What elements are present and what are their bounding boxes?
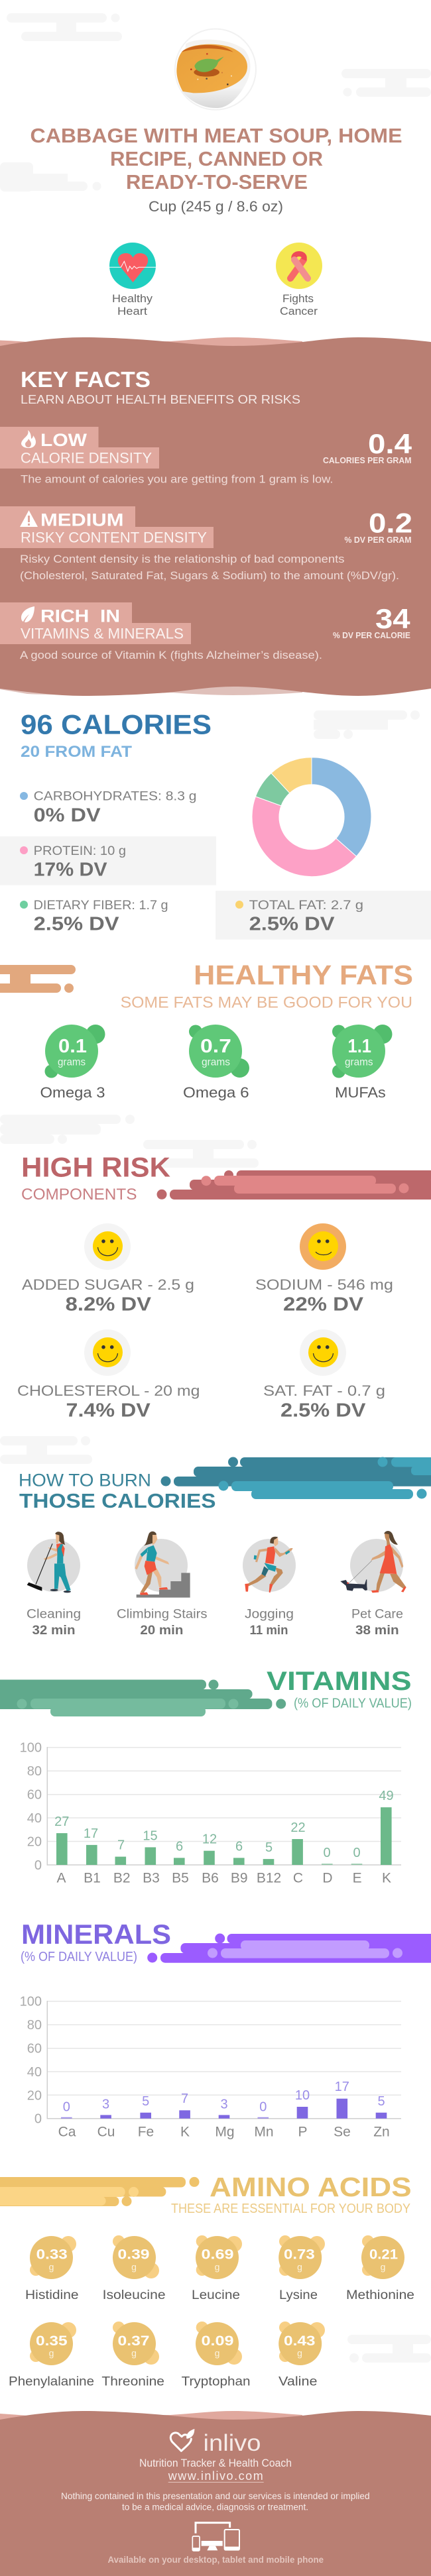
bar chart: vitamins: 0 (353, 1846, 361, 1860)
bar chart: minerals: 5 (142, 2094, 149, 2109)
amino: leucine: 0.69 (202, 2247, 233, 2263)
amino: threonine: g (131, 2347, 137, 2358)
badge: omega 3 (40, 1025, 105, 1101)
bar chart: minerals: Zn (373, 2124, 390, 2139)
label: fights cancer: Cancer (280, 306, 318, 317)
bar chart: minerals: K (180, 2124, 190, 2139)
component: sodium: 22% DV (283, 1294, 364, 1315)
macro: total fat (216, 891, 431, 940)
amino: isoleucine: g (131, 2261, 137, 2272)
label: fights cancer (280, 293, 318, 317)
fact: low calorie density (0, 427, 412, 486)
bar chart: minerals: Cu (97, 2124, 115, 2139)
amino: valine: g (297, 2347, 302, 2358)
macro: protein (0, 836, 216, 885)
bar chart: vitamins: B6 (202, 1871, 219, 1886)
title: RECIPE, CANNED OR (110, 147, 323, 170)
logo: inlivo: inlivo (203, 2430, 261, 2456)
bar chart: minerals: 0 (259, 2100, 267, 2115)
activity: jogging: Jogging (245, 1608, 294, 1621)
badge: omega 6: grams (202, 1057, 230, 1068)
bar chart: minerals: Se (334, 2124, 351, 2139)
fact: rich in vitamins and minerals: A good source of Vitamin K (fights Alzheimer’s disease). (20, 649, 322, 661)
amino: lysine: 0.73 (284, 2247, 315, 2263)
amino: histidine (25, 2236, 79, 2302)
component: cholesterol: 7.4% DV (66, 1400, 151, 1421)
bar chart: vitamins: 6 (176, 1839, 183, 1854)
bar chart: minerals: Ca (58, 2124, 76, 2139)
food photo: bowl of soup (175, 29, 256, 110)
subheading: LEARN ABOUT HEALTH BENEFITS OR RISKS (21, 392, 300, 406)
bar chart: vitamins: 27 (54, 1815, 69, 1829)
amino: leucine (192, 2235, 242, 2302)
activity: jogging (243, 1537, 296, 1638)
bar chart: minerals (20, 1995, 401, 2139)
label: fights cancer: Fights (282, 293, 314, 305)
fact: medium risky content density: MEDIUM (40, 510, 123, 530)
bar chart: vitamins: 12 (202, 1832, 217, 1847)
fact: low calorie density: 0.4 (368, 428, 412, 459)
bar chart: minerals: 17 (335, 2080, 349, 2094)
bar chart: minerals: 20 (27, 2088, 42, 2103)
bar chart: vitamins: B1 (84, 1871, 101, 1886)
activity: climbing stairs: 20 min (140, 1624, 183, 1638)
bar chart: minerals: 80 (27, 2018, 42, 2033)
bar chart: minerals: 10 (295, 2088, 310, 2103)
heading: how to burn those calories (19, 1470, 216, 1512)
bar chart: minerals: 40 (27, 2065, 42, 2080)
component: added sugar (22, 1223, 194, 1315)
bar chart: minerals: 5 (377, 2094, 385, 2109)
bar chart: vitamins: 22 (290, 1820, 306, 1835)
bar chart: minerals: Fe (138, 2124, 154, 2139)
subheading: healthy fats: SOME FATS MAY BE GOOD FOR YOU (121, 994, 412, 1012)
bar chart: minerals: P (298, 2124, 308, 2139)
amino: lysine: g (297, 2261, 302, 2272)
bar chart: minerals: 100 (20, 1995, 42, 2009)
bar chart: minerals: 0 (63, 2100, 70, 2115)
amino: phenylalanine: Phenylalanine (9, 2375, 94, 2388)
activity: pet care: 38 min (355, 1624, 399, 1638)
heading: 96 calories: 96 CALORIES (21, 709, 212, 740)
amino: histidine: g (49, 2261, 54, 2272)
amino: methionine: 0.21 (369, 2247, 398, 2263)
amino: isoleucine (103, 2235, 166, 2302)
bar chart: vitamins: 20 (27, 1834, 42, 1849)
amino: threonine: 0.37 (118, 2333, 150, 2349)
bar chart: vitamins: B12 (257, 1871, 281, 1886)
badge: mufas (332, 1025, 393, 1101)
fact: rich in vitamins and minerals (0, 602, 410, 661)
amino: histidine: Histidine (25, 2288, 79, 2302)
fact: low calorie density: The amount of calories you are getting from 1 gram is low. (21, 474, 333, 486)
macro: dietary fiber (20, 899, 168, 934)
amino: tryptophan: Tryptophan (182, 2375, 251, 2388)
bar chart: vitamins: B9 (231, 1871, 248, 1886)
subheading: from fat: 20 FROM FAT (21, 743, 132, 761)
badge: mufas: grams (345, 1057, 373, 1068)
bar chart: minerals: 0 (34, 2112, 42, 2127)
activity: cleaning (27, 1532, 81, 1638)
fact: medium risky content density (0, 506, 412, 582)
macro: protein: 17% DV (34, 860, 107, 881)
badge: mufas: MUFAs (335, 1084, 386, 1101)
macro: dietary fiber: 2.5% DV (34, 913, 119, 934)
amino: phenylalanine (9, 2322, 94, 2388)
macro: dietary fiber: DIETARY FIBER: 1.7 g (34, 899, 168, 913)
heading: amino acids: AMINO ACIDS (210, 2172, 412, 2202)
activity: pet care: Pet Care (351, 1608, 403, 1621)
logo: inlivo (170, 2429, 261, 2456)
bar chart: vitamins: 0 (323, 1846, 331, 1860)
fact: low calorie density: LOW (40, 430, 88, 450)
component: cholesterol: CHOLESTEROL - 20 mg (17, 1382, 200, 1399)
subheading: minerals: (% OF DAILY VALUE) (21, 1950, 137, 1964)
component: saturated fat: SAT. FAT - 0.7 g (263, 1382, 385, 1399)
subheading: amino acids: THESE ARE ESSENTIAL FOR YOUR BODY (171, 2202, 410, 2216)
serving size: Cup (245 g / 8.6 oz) (149, 198, 283, 215)
amino: valine (278, 2322, 325, 2388)
fact: medium risky content density: RISKY CONTENT DENSITY (21, 530, 207, 546)
subheading: vitamins: (% OF DAILY VALUE) (294, 1697, 412, 1711)
heading: how to burn those calories: THOSE CALORIES (19, 1490, 216, 1512)
component: saturated fat (263, 1329, 385, 1421)
activity: cleaning: Cleaning (27, 1608, 81, 1621)
amino: tryptophan (182, 2322, 251, 2388)
heading: high risk: HIGH RISK (21, 1152, 170, 1183)
amino: tryptophan: 0.09 (202, 2333, 233, 2349)
label: healthy heart: Heart (117, 306, 147, 317)
bar chart: vitamins: 49 (379, 1789, 394, 1803)
bar chart: vitamins: 60 (27, 1788, 42, 1803)
fact: medium risky content density: 0.2 (369, 508, 412, 539)
bar chart: vitamins: A (56, 1871, 66, 1886)
bar chart: vitamins: B5 (172, 1871, 189, 1886)
panel: footer (0, 2411, 431, 2576)
amino: valine: 0.43 (284, 2333, 316, 2349)
badge: omega 6 (183, 1025, 249, 1101)
bar chart: vitamins: B2 (113, 1871, 131, 1886)
fact: medium risky content density: % DV PER GRAM (345, 535, 411, 545)
amino: phenylalanine: 0.35 (36, 2333, 68, 2349)
macro: carbohydrates (20, 790, 196, 826)
activity: pet care (340, 1531, 406, 1638)
donut chart (252, 757, 371, 877)
icon: flame (21, 430, 36, 448)
disclaimer: Nothing contained in this presentation and our services is intended or implied (61, 2491, 370, 2501)
icon: healthy heart (109, 243, 156, 289)
website link: www.inlivo.com (168, 2469, 263, 2483)
label: healthy heart (112, 293, 153, 317)
icon: warning triangle (20, 510, 38, 527)
badge: omega 3: grams (58, 1057, 86, 1068)
macro: total fat: 2.5% DV (249, 913, 335, 934)
badge: omega 6: 0.7 (200, 1036, 231, 1057)
amino: methionine: g (381, 2261, 385, 2272)
bar chart: minerals: 60 (27, 2041, 42, 2056)
label: healthy heart: Healthy (112, 293, 153, 305)
badge: omega 3: 0.1 (58, 1036, 87, 1057)
amino: leucine: g (215, 2261, 219, 2272)
subheading: components: COMPONENTS (21, 1186, 137, 1204)
bar chart: vitamins: 15 (143, 1828, 158, 1843)
amino: lysine: Lysine (279, 2288, 318, 2302)
panel: key facts (0, 337, 431, 696)
amino: threonine: Threonine (101, 2375, 164, 2388)
title: READY-TO-SERVE (126, 170, 308, 194)
component: cholesterol (17, 1329, 200, 1421)
bar chart: minerals: 3 (220, 2098, 228, 2112)
component: sodium (255, 1223, 393, 1315)
amino: valine: Valine (278, 2375, 317, 2388)
bar chart: vitamins: C (293, 1871, 303, 1886)
activity: cleaning: 32 min (32, 1624, 76, 1638)
heading: minerals: MINERALS (21, 1919, 171, 1950)
bar chart: minerals: Mg (215, 2124, 235, 2139)
bar chart: vitamins: 7 (117, 1838, 125, 1853)
amino: tryptophan: g (215, 2347, 219, 2358)
amino: phenylalanine: g (49, 2347, 54, 2358)
fact: rich in vitamins and minerals: VITAMINS & MINERALS (21, 626, 184, 642)
fact: medium risky content density: (Cholesterol, Saturated Fat, Sugars & Sodium) to the amount (%DV/gr). (20, 570, 399, 582)
bar chart: vitamins (20, 1741, 401, 1886)
disclaimer: to be a medical advice, diagnosis or treatment. (122, 2501, 308, 2512)
fact: rich in vitamins and minerals: 34 (375, 603, 410, 634)
bar chart: vitamins: 5 (265, 1840, 273, 1855)
heading: key facts: KEY FACTS (21, 368, 151, 392)
title (31, 124, 402, 194)
component: added sugar: ADDED SUGAR - 2.5 g (22, 1276, 194, 1293)
heading: vitamins: VITAMINS (267, 1667, 412, 1696)
bar chart: minerals: Mn (254, 2124, 274, 2139)
fact: low calorie density: CALORIES PER GRAM (323, 456, 411, 465)
icon: devices (192, 2523, 239, 2551)
macro: carbohydrates: 0% DV (34, 805, 101, 826)
bar chart: minerals: 7 (181, 2092, 188, 2106)
fact: rich in vitamins and minerals: % DV PER CALORIE (333, 631, 410, 640)
component: saturated fat: 2.5% DV (280, 1400, 366, 1421)
availability note: Available on your desktop, tablet and mobile phone (107, 2554, 324, 2565)
icon: fights cancer ribbon (276, 243, 322, 289)
badge: omega 3: Omega 3 (40, 1084, 105, 1101)
macro: total fat: TOTAL FAT: 2.7 g (249, 899, 363, 913)
activity: climbing stairs (117, 1532, 208, 1638)
component: sodium: SODIUM - 546 mg (255, 1276, 393, 1293)
macro: carbohydrates: CARBOHYDRATES: 8.3 g (34, 790, 196, 804)
fact: rich in vitamins and minerals: RICH IN (40, 606, 120, 626)
amino: histidine: 0.33 (36, 2247, 68, 2263)
badge: omega 6: Omega 6 (183, 1084, 249, 1101)
bar chart: vitamins: 0 (34, 1858, 42, 1873)
amino: threonine (101, 2322, 164, 2388)
title: CABBAGE WITH MEAT SOUP, HOME (31, 124, 402, 147)
amino: methionine (346, 2235, 414, 2302)
fact: low calorie density: CALORIE DENSITY (21, 450, 152, 467)
amino: isoleucine: Isoleucine (103, 2288, 166, 2302)
amino: methionine: Methionine (346, 2288, 414, 2302)
bar chart: vitamins: 40 (27, 1811, 42, 1826)
amino: lysine (278, 2235, 325, 2302)
bar chart: minerals: 3 (102, 2098, 109, 2112)
bar chart: vitamins: 17 (84, 1826, 98, 1841)
macro: protein: PROTEIN: 10 g (34, 844, 126, 858)
bar chart: vitamins: B3 (143, 1871, 160, 1886)
amino: isoleucine: 0.39 (118, 2247, 150, 2263)
bar chart: vitamins: D (322, 1871, 333, 1886)
heading: healthy fats: HEALTHY FATS (194, 960, 413, 991)
disclaimer (61, 2491, 370, 2512)
icon: leaf (21, 606, 34, 622)
amino: leucine: Leucine (192, 2288, 240, 2302)
bar chart: vitamins: E (353, 1871, 362, 1886)
activity: jogging: 11 min (249, 1624, 288, 1638)
bar chart: vitamins: 80 (27, 1764, 42, 1779)
tagline: Nutrition Tracker & Health Coach (139, 2457, 292, 2469)
component: added sugar: 8.2% DV (66, 1294, 152, 1315)
bar chart: vitamins: K (382, 1871, 391, 1886)
bar chart: vitamins: 6 (235, 1839, 243, 1854)
activity: climbing stairs: Climbing Stairs (117, 1608, 208, 1621)
heading: how to burn those calories: HOW TO BURN (19, 1470, 151, 1490)
fact: medium risky content density: Risky Content density is the relationship of bad components (20, 553, 345, 565)
badge: mufas: 1.1 (347, 1036, 371, 1057)
bar chart: vitamins: 100 (20, 1741, 42, 1756)
